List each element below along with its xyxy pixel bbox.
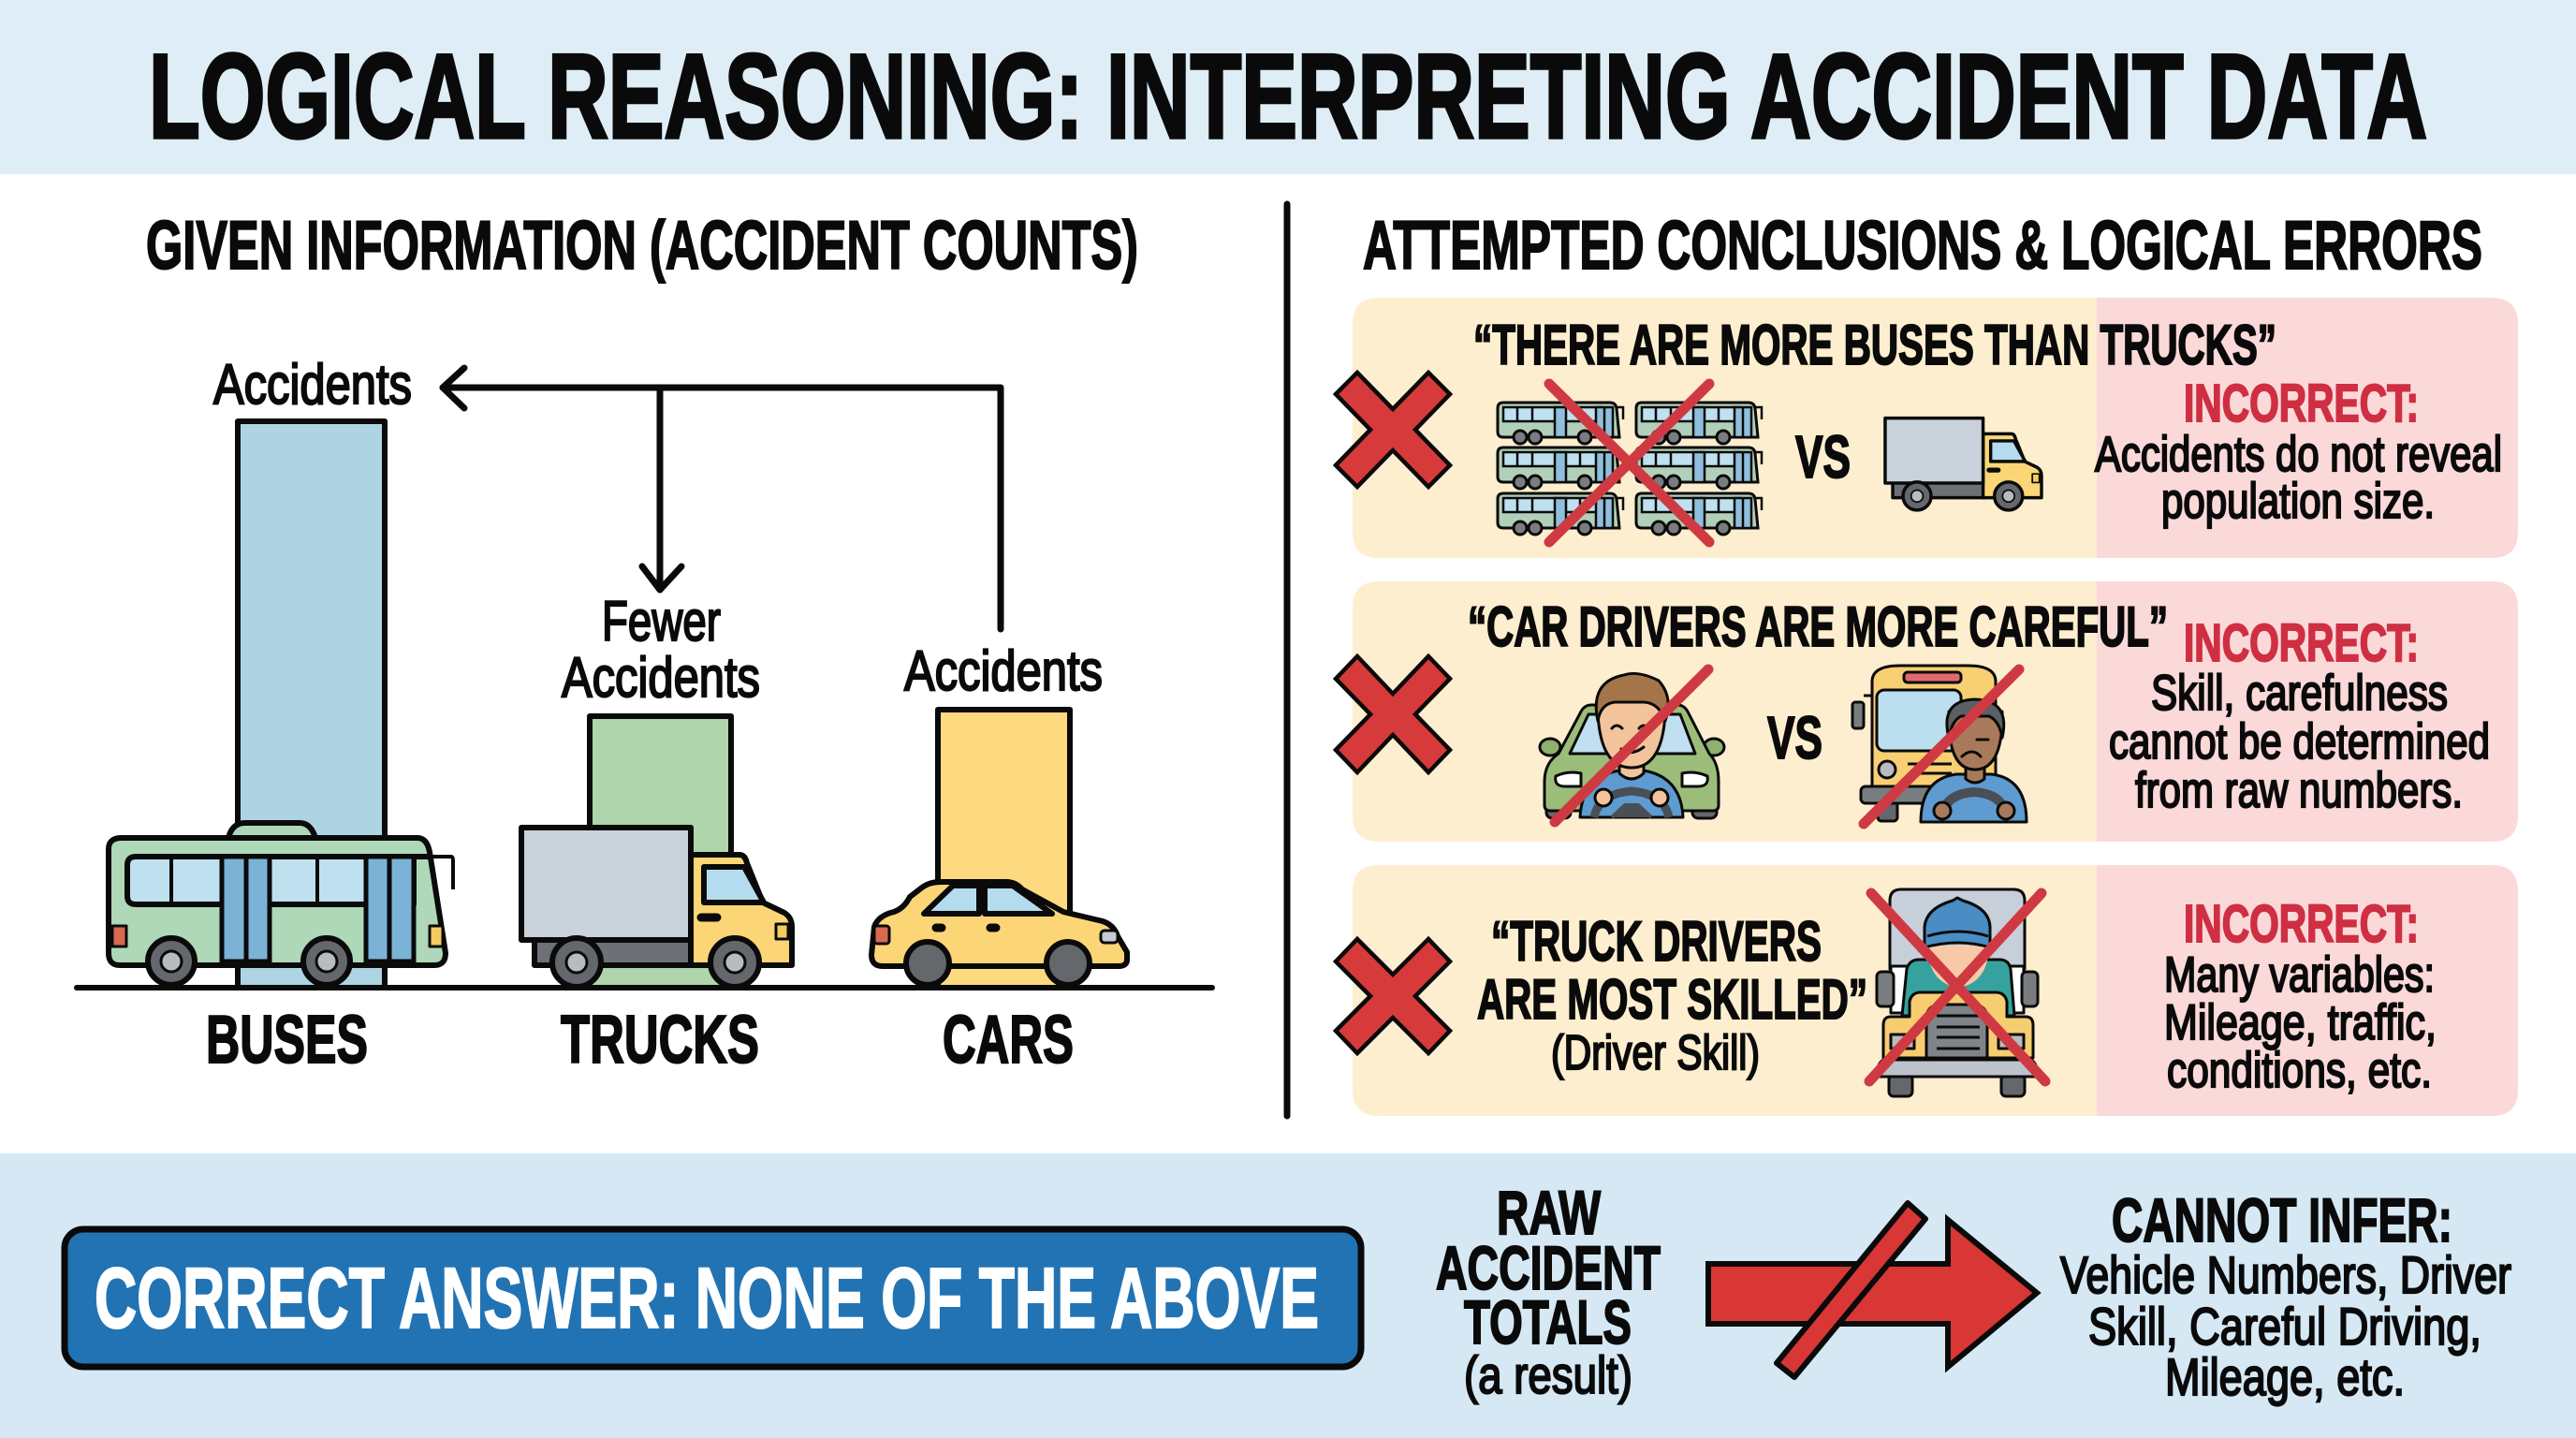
bar: trucks: [590, 716, 731, 988]
vs: VS: [1767, 704, 1822, 771]
verdict: [2095, 374, 2502, 529]
label: fewer accidents: Fewer: [602, 590, 721, 653]
verdict: INCORRECT:: [2184, 374, 2419, 433]
text: cannot infer: Skill, Careful Driving,: [2088, 1297, 2481, 1356]
icon: truck front with driver crossed out: [1869, 889, 2045, 1096]
label: fewer accidents: [562, 590, 760, 709]
verdict: INCORRECT:: [2184, 894, 2419, 954]
icon: car: [871, 882, 1127, 985]
label: accidents over cars: Accidents: [904, 639, 1103, 702]
icon: bus: [109, 823, 453, 985]
icon: red X: [1336, 656, 1450, 772]
label: fewer accidents: Accidents: [562, 646, 760, 709]
panel: bottom summary: [0, 1153, 2576, 1438]
verdict: Mileage, traffic,: [2164, 995, 2437, 1050]
text: cannot infer: Mileage, etc.: [2165, 1347, 2405, 1406]
heading: given information: GIVEN INFORMATION (ACCIDENT COUNTS): [146, 208, 1138, 284]
arrow: crossed-out inference: [1708, 1203, 2037, 1377]
verdict: cannot be determined: [2109, 714, 2490, 770]
quote: “TRUCK DRIVERS: [1491, 910, 1822, 973]
verdict: INCORRECT:: [2184, 613, 2419, 673]
panel: conclusion 3: [1336, 865, 2518, 1116]
icon: red X: [1336, 939, 1450, 1053]
panel: conclusion 2: [1336, 581, 2518, 842]
icon: red X: [1336, 373, 1450, 487]
quote: ARE MOST SKILLED”: [1477, 968, 1867, 1031]
arrow: comparison connectors: [443, 368, 1001, 629]
baseline axis: [77, 985, 1212, 990]
bar: cars: [938, 710, 1070, 988]
icon: six buses crossed out: [1498, 384, 1762, 542]
icon: frowning bus driver crossed out: [1852, 666, 2027, 824]
verdict: [2164, 894, 2437, 1098]
text: raw accident totals: (a result): [1464, 1345, 1632, 1404]
panel: given information: [77, 208, 1212, 1078]
text: raw accident totals: ACCIDENT: [1436, 1233, 1661, 1302]
divider: [1284, 204, 1290, 1116]
text: raw accident totals: RAW: [1497, 1178, 1602, 1247]
text: raw accident totals: TOTALS: [1464, 1287, 1632, 1357]
label: accidents over buses: Accidents: [213, 353, 412, 416]
verdict: from raw numbers.: [2135, 763, 2463, 818]
text: cannot infer: [2060, 1185, 2511, 1406]
verdict: conditions, etc.: [2167, 1043, 2432, 1098]
verdict: [2109, 613, 2490, 818]
verdict: Many variables:: [2164, 947, 2435, 1003]
header band: [0, 0, 2576, 174]
verdict: Skill, carefulness: [2151, 666, 2448, 721]
label: cars: CARS: [943, 1003, 1074, 1078]
icon: smiling car driver crossed out: [1540, 669, 1724, 822]
quote: [1477, 910, 1867, 1080]
panel: conclusion 1: [1336, 298, 2518, 558]
label: trucks: TRUCKS: [561, 1003, 759, 1078]
vs: VS: [1795, 423, 1851, 491]
callout: correct answer: [65, 1229, 1361, 1367]
quote: (Driver Skill): [1551, 1026, 1760, 1080]
icon: truck: [521, 828, 792, 987]
quote: “CAR DRIVERS ARE MORE CAREFUL”: [1468, 595, 2168, 658]
icon: small truck: [1885, 418, 2042, 510]
bar: buses: [238, 421, 385, 988]
verdict: population size.: [2161, 474, 2435, 529]
label: buses: BUSES: [206, 1003, 368, 1078]
text: raw accident totals: [1436, 1178, 1661, 1404]
callout: correct answer: CORRECT ANSWER: NONE OF THE ABOVE: [95, 1251, 1319, 1346]
